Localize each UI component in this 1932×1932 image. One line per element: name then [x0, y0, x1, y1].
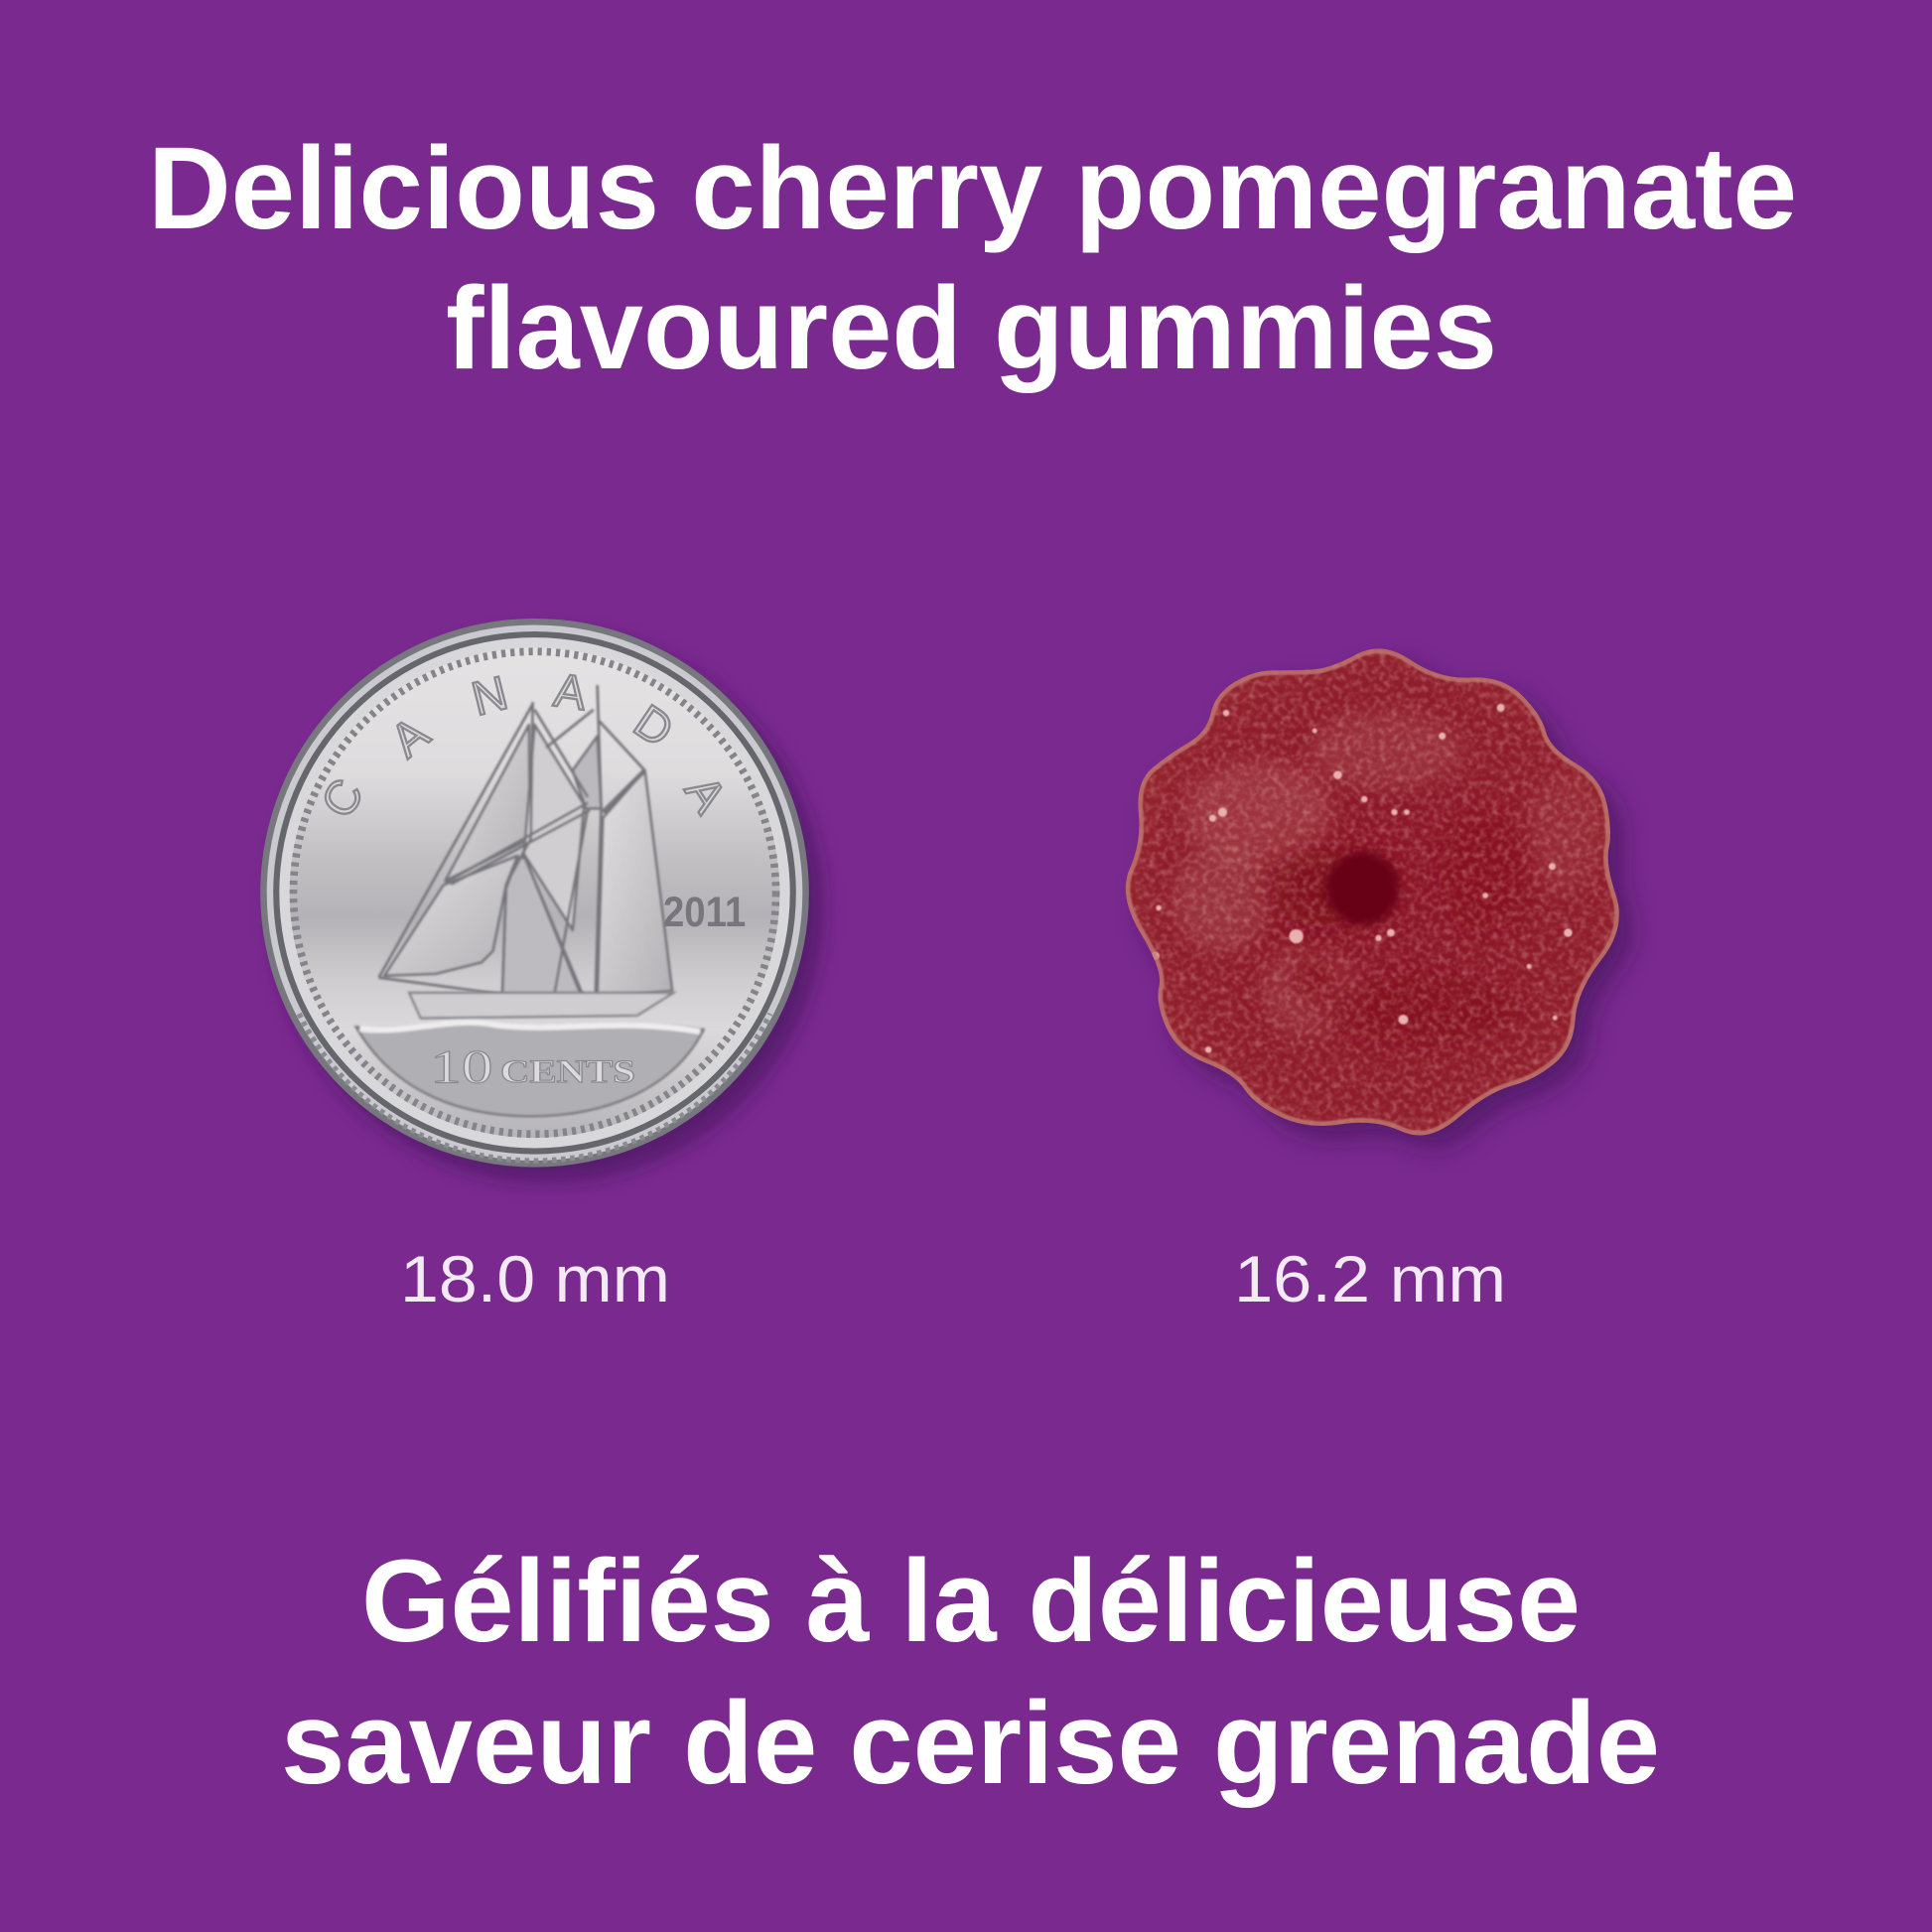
title: French — [281, 1536, 1660, 1809]
coin legend: CANADA: A — [381, 707, 439, 768]
title: English: Delicious cherry pomegranate — [148, 123, 1797, 254]
coin legend: CANADA: A — [674, 766, 736, 822]
coin denomination: 10 CENTS — [430, 1041, 635, 1094]
coin legend: CANADA: D — [624, 695, 682, 758]
title: French: saveur de cerise grenade — [281, 1678, 1660, 1809]
title: French: Gélifiés à la délicieuse — [361, 1536, 1581, 1667]
coin legend: CANADA: N — [467, 667, 513, 727]
gummy size label: 16.2 mm — [1234, 1242, 1506, 1315]
infographic canvas — [155, 143, 1793, 1808]
coin denomination: 10 CENTS: CENTS — [500, 1054, 635, 1090]
title: English — [148, 123, 1797, 394]
coin: schooner sails — [379, 685, 672, 1002]
dime size label: 18.0 mm — [400, 1242, 670, 1315]
coin legend: CANADA: A — [551, 664, 590, 721]
gummy centre dimple — [1325, 851, 1400, 925]
coin legend: CANADA: C — [312, 770, 374, 827]
coin: Canadian dime — [260, 619, 823, 1182]
gummy soft shadow — [1132, 655, 1642, 1158]
coin legend: CANADA — [312, 664, 736, 827]
coin denomination: 10 CENTS: 10 — [430, 1041, 492, 1094]
gummy sugared rim — [1126, 648, 1619, 1135]
gummy: cherry pomegranate — [1126, 648, 1642, 1158]
coin: hull and sea — [356, 993, 704, 1116]
title: English: flavoured gummies — [446, 263, 1497, 394]
coin date: 2011: 2011 — [663, 889, 746, 936]
